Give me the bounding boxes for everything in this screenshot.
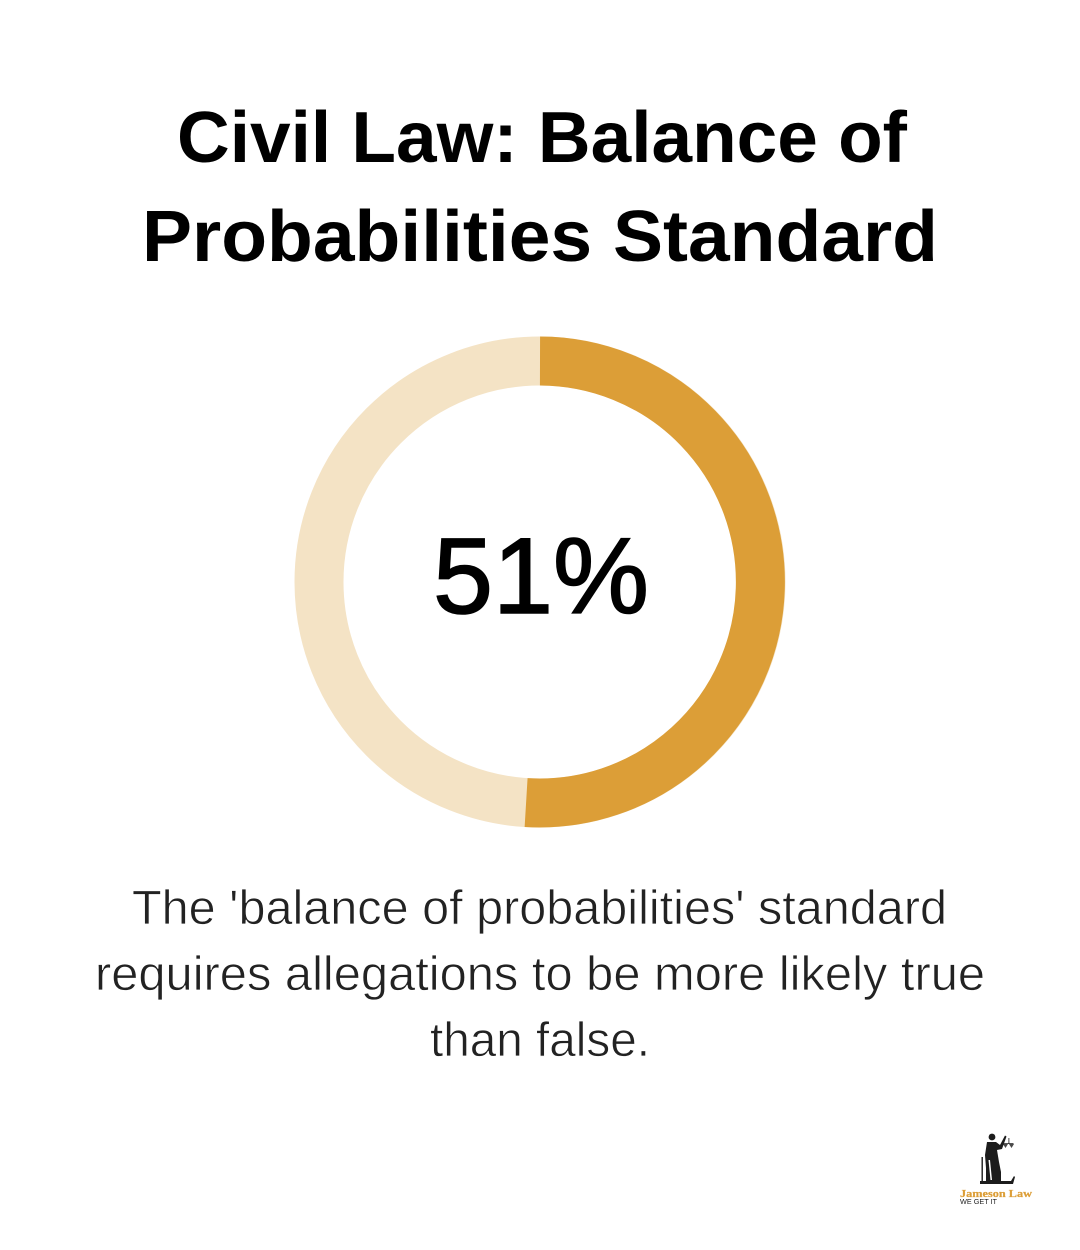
description text [95,882,985,1067]
description text: requires allegations to be more likely true [95,948,985,1001]
donut value: 51% [433,515,649,636]
description text: The 'balance of probabilities' standard [132,882,947,935]
donut chart: 51% [319,361,761,803]
tagline: WE GET IT [960,1199,998,1206]
description text: than false. [430,1014,650,1067]
icon: lady justice [980,1134,1015,1184]
brand name: Jameson Law [960,1188,1032,1200]
logo: Jameson Law [960,1134,1032,1206]
title: Probabilities Standard [142,197,938,277]
title [142,98,938,277]
title: Civil Law: Balance of [177,98,908,178]
